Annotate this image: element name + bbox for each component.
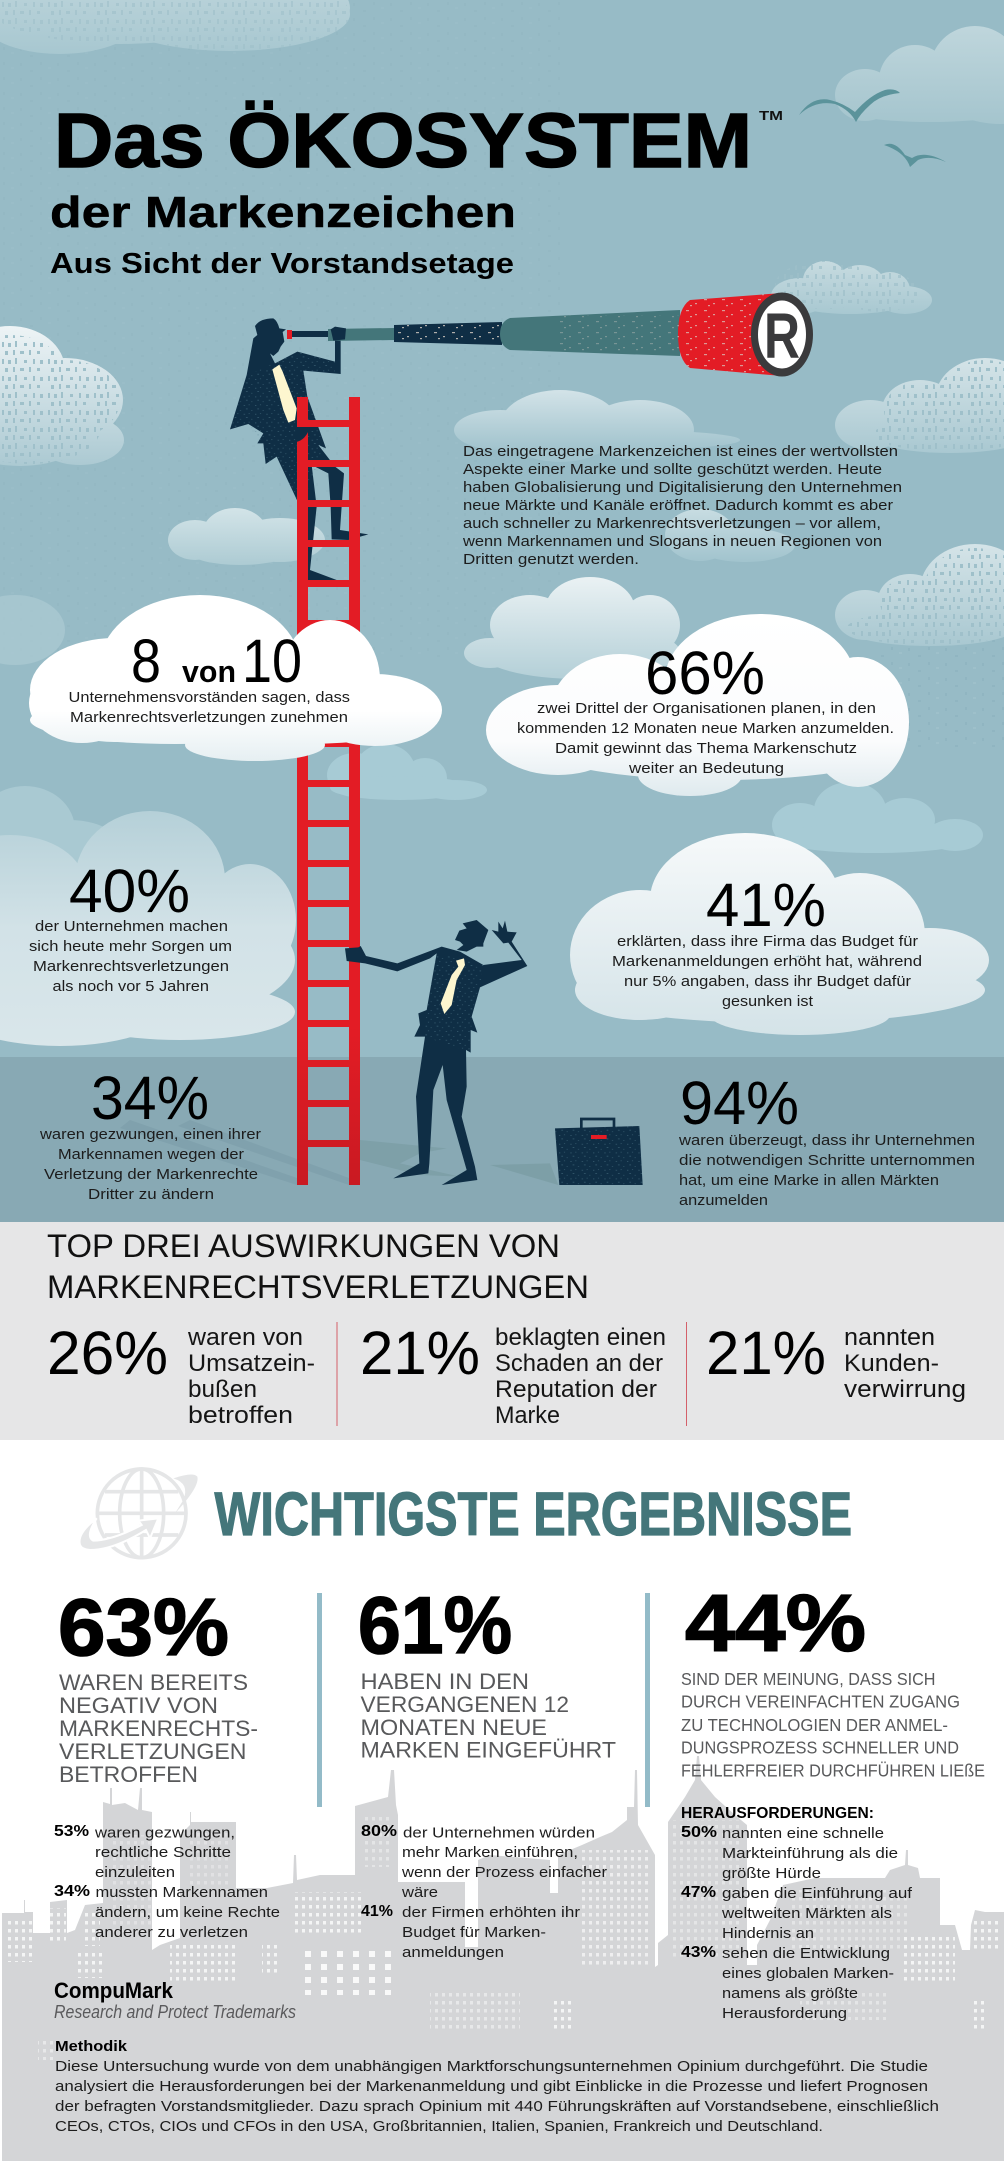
column: 63%: 63% — [58, 1583, 229, 1673]
column: 63%: WAREN BEREITS — [59, 1670, 248, 1695]
column: 63% — [54, 1583, 280, 1941]
title: Das ÖKOSYSTEM — [54, 98, 752, 184]
methodology text — [55, 2038, 939, 2135]
bullets: challenges: gaben die Einführung auf — [722, 1885, 913, 1902]
title: TM — [759, 108, 783, 123]
title: Aus Sicht der Vorstandsetage — [50, 248, 514, 280]
panel: key results background — [0, 1440, 1004, 2161]
column: 61%: 61% — [358, 1581, 512, 1671]
bullets: challenges: sehen die Entwicklung — [722, 1945, 890, 1962]
bullets: 63%: rechtliche Schritte — [95, 1844, 231, 1861]
column: 44%: 44% — [685, 1579, 866, 1669]
intro text: wenn Markennamen und Slogans in neuen Regionen von — [462, 533, 882, 550]
bullets: 63% — [54, 1823, 280, 1941]
column: 44% — [681, 1579, 985, 2022]
methodology text: Diese Untersuchung wurde von dem unabhängigen Marktforschungsunternehmen Opinium durchgeführt. Die Studie — [55, 2058, 928, 2075]
stat: 21% confusion: verwirrung — [844, 1376, 966, 1403]
city skyline — [2, 1756, 1004, 2161]
methodology text: der befragten Vorstandsmitglieder. Dazu sprach Opinium mit 440 Führungskräften auf Vorstandsebene, einschließlich — [55, 2098, 939, 2115]
cloud stat: 41%: gesunken ist — [722, 993, 814, 1010]
stat: 94%: waren überzeugt, dass ihr Unternehmen — [678, 1132, 975, 1149]
stat: 21% reputation: 21% — [360, 1319, 480, 1387]
bullets: 61%: 41% — [361, 1903, 393, 1920]
column: 61%: HABEN IN DEN — [360, 1669, 529, 1694]
cloud stat: 66%: Damit gewinnt das Thema Markenschutz — [555, 740, 857, 757]
bullets: 61%: wäre — [401, 1884, 438, 1901]
cloud stat: 41%: nur 5% angaben, dass ihr Budget dafür — [624, 973, 911, 990]
cloud stat: 8 von 10: 8 — [131, 627, 161, 695]
cloud stat: 41%: 41% — [706, 871, 826, 939]
cloud stat: 8 von 10: Markenrechtsverletzungen zunehmen — [70, 709, 348, 726]
column: 63%: VERLETZUNGEN — [59, 1739, 246, 1764]
figure: man holding ladder with briefcase — [345, 920, 643, 1185]
panel: sky background — [0, 0, 1004, 1222]
heading: key results: WICHTIGSTE ERGEBNISSE — [214, 1480, 852, 1548]
bullets: 63%: 53% — [54, 1823, 89, 1840]
stat: 94%: anzumelden — [679, 1192, 768, 1209]
clouds: background layer — [0, 0, 1004, 900]
cloud stat: 40% — [0, 811, 296, 1046]
bullets: 63%: anderer zu verletzen — [95, 1924, 248, 1941]
intro text — [462, 443, 902, 568]
figure: man on ladder with telescope — [230, 318, 368, 580]
logo: CompuMark — [54, 1978, 296, 2022]
bullets: 63%: waren gezwungen, — [94, 1824, 235, 1842]
cloud stat: 8 von 10: 10 — [242, 627, 302, 695]
bullets: challenges: eines globalen Marken- — [722, 1965, 894, 1982]
stat: 21% confusion: Kunden- — [844, 1350, 939, 1377]
cloud stat: 40%: Markenrechtsverletzungen — [33, 958, 229, 975]
birds — [799, 89, 946, 167]
bullets: 61%: der Firmen erhöhten ihr — [402, 1904, 580, 1921]
intro text: neue Märkte und Kanäle eröffnet. Dadurch kommt es aber — [463, 497, 893, 514]
bullets: 63%: einzuleiten — [95, 1864, 175, 1881]
column: 61%: VERGANGENEN 12 — [360, 1692, 569, 1717]
stat: 34%: Verletzung der Markenrechte — [44, 1166, 258, 1183]
stat: 34% — [39, 1064, 261, 1203]
intro text: haben Globalisierung und Digitalisierung den Unternehmen — [463, 479, 902, 496]
stat: 34%: Dritter zu ändern — [88, 1186, 214, 1203]
stat: 26%: Umsatzein- — [188, 1350, 315, 1377]
bullets: 61%: mehr Marken einführen, — [402, 1844, 578, 1861]
bullets: challenges: Hindernis an — [722, 1925, 814, 1942]
stat: 26%: bußen — [188, 1376, 257, 1403]
panel: top three effects — [0, 1222, 1004, 1440]
column: 61% — [358, 1581, 616, 1961]
stat: 34%: waren gezwungen, einen ihrer — [39, 1126, 261, 1143]
cloud stat: 66%: kommenden 12 Monaten neue Marken anzumelden. — [517, 720, 894, 737]
column: 63%: MARKENRECHTS- — [59, 1716, 258, 1741]
stat: 34%: Markennamen wegen der — [58, 1146, 244, 1163]
stat: 94%: 94% — [680, 1069, 799, 1137]
stat: 94%: die notwendigen Schritte unternommen — [679, 1152, 975, 1169]
heading: top three effects: TOP DREI AUSWIRKUNGEN VON — [47, 1228, 560, 1264]
bullets: 61%: 80% — [361, 1823, 397, 1840]
stat: 21% reputation: Schaden an der — [495, 1350, 663, 1377]
bullets: challenges: Herausforderung — [722, 2005, 847, 2022]
cloud stat: 41%: erklärten, dass ihre Firma das Budget für — [617, 933, 918, 950]
bullets: 61% — [361, 1823, 607, 1961]
cloud stat: 66% — [486, 614, 909, 796]
cloud stat: 40%: sich heute mehr Sorgen um — [29, 938, 232, 955]
heading: top three effects: MARKENRECHTSVERLETZUNGEN — [47, 1269, 589, 1305]
stat: 26%: waren von — [187, 1324, 303, 1351]
icon: globe — [80, 1469, 198, 1558]
cloud stat: 66%: 66% — [645, 639, 765, 707]
column: 44%: DUNGSPROZESS SCHNELLER UND — [681, 1738, 959, 1758]
column: 61%: MONATEN NEUE — [360, 1715, 547, 1740]
telescope with trademark lens — [287, 292, 813, 376]
stat: 26%: 26% — [47, 1319, 168, 1387]
bullets: challenges: weltweiten Märkten als — [721, 1905, 892, 1922]
cloud stat: 41%: Markenanmeldungen erhöht hat, während — [612, 953, 922, 970]
telescope with trademark lens: R — [764, 300, 800, 372]
cloud stat: 8 von 10: Unternehmensvorständen sagen, dass — [68, 689, 350, 706]
bullets: challenges: Markteinführung als die — [722, 1845, 898, 1862]
stat: 94% — [678, 1069, 975, 1209]
cloud stat: 66%: weiter an Bedeutung — [628, 760, 784, 777]
stat: 21% reputation: beklagten einen — [495, 1324, 666, 1351]
stat: 26%: betroffen — [188, 1402, 293, 1429]
intro text: auch schneller zu Markenrechtsverletzungen – vor allem, — [463, 515, 881, 532]
intro text: Dritten genutzt werden. — [463, 551, 639, 568]
methodology text: analysiert die Herausforderungen bei der Markenanmeldung und gibt Einblicke in die Prozesse und liefert Prognosen — [55, 2078, 928, 2095]
intro text: Aspekte einer Marke und sollte geschützt werden. Heute — [463, 461, 882, 478]
column: 63%: NEGATIV VON — [59, 1693, 218, 1718]
bullets: challenges: größte Hürde — [722, 1865, 821, 1882]
bullets: challenges: nannten eine schnelle — [722, 1825, 884, 1842]
bullets: challenges: 43% — [681, 1944, 716, 1961]
stat: 26% — [47, 1319, 315, 1429]
bullets: 61%: wenn der Prozess einfacher — [401, 1864, 607, 1881]
stat: 21% confusion: nannten — [844, 1324, 935, 1351]
bullets: challenges: namens als größte — [722, 1985, 858, 2002]
column: 44%: SIND DER MEINUNG, DASS SICH — [681, 1669, 936, 1689]
column: 63%: BETROFFEN — [59, 1762, 198, 1787]
bullets: challenges: 47% — [681, 1884, 716, 1901]
logo: CompuMark: CompuMark — [54, 1978, 174, 2003]
title — [50, 98, 783, 280]
cloud stat: 41% — [570, 833, 989, 1035]
stat: 34%: 34% — [91, 1064, 209, 1132]
dividers — [317, 1593, 650, 1807]
cloud stat: 40%: 40% — [69, 857, 190, 925]
stat: 21% reputation: Reputation der — [495, 1376, 657, 1403]
column: 44%: ZU TECHNOLOGIEN DER ANMEL- — [681, 1715, 948, 1735]
intro text: Das eingetragene Markenzeichen ist eines der wertvollsten — [463, 443, 898, 460]
column: 44%: DURCH VEREINFACHTEN ZUGANG — [681, 1692, 960, 1712]
bullets: 63%: mussten Markennamen — [96, 1884, 268, 1901]
column: 44%: FEHLERFREIER DURCHFÜHREN LIEßE — [681, 1760, 985, 1780]
stat: 21% reputation: Marke — [495, 1402, 560, 1429]
stat: 94%: hat, um eine Marke in allen Märkten — [679, 1172, 939, 1189]
bullets: challenges: 50% — [681, 1824, 717, 1841]
cloud stat: 8 von 10 — [29, 595, 442, 761]
cloud stat: 40%: der Unternehmen machen — [35, 918, 228, 935]
heading: top three effects — [47, 1228, 589, 1305]
title: der Markenzeichen — [50, 188, 516, 237]
bullets: 63%: 34% — [54, 1883, 90, 1900]
bullets: 61%: der Unternehmen würden — [403, 1824, 595, 1842]
cloud stat: 66%: zwei Drittel der Organisationen planen, in den — [537, 700, 876, 717]
bullets: 63%: ändern, um keine Rechte — [95, 1904, 280, 1921]
methodology text: CEOs, CTOs, CIOs und CFOs in den USA, Großbritannien, Italien, Spanien, Frankreich und Deutschland. — [55, 2118, 823, 2135]
bullets: 61%: anmeldungen — [402, 1944, 504, 1961]
stat: 21% confusion: 21% — [706, 1319, 826, 1387]
stat: 21% reputation — [360, 1319, 666, 1429]
bullets: challenges: HERAUSFORDERUNGEN: — [681, 1805, 874, 1822]
cloud stat: 8 von 10: von — [182, 654, 236, 689]
logo: CompuMark: Research and Protect Trademarks — [54, 2002, 296, 2022]
bullets: 61%: Budget für Marken- — [402, 1924, 546, 1941]
bullets: challenges — [681, 1805, 913, 2022]
column: 61%: MARKEN EINGEFÜHRT — [360, 1738, 616, 1762]
cloud stat: 40%: als noch vor 5 Jahren — [52, 978, 209, 995]
stat: 21% confusion — [706, 1319, 966, 1403]
ladder — [296, 397, 360, 1185]
methodology text: Methodik — [55, 2038, 128, 2055]
